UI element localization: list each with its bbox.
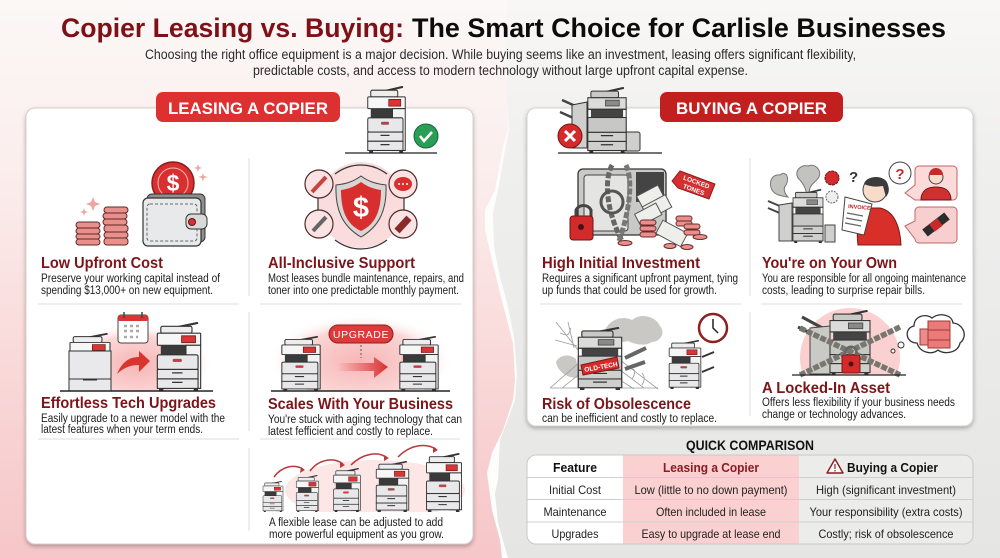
body: effortless tech upgrades: Easily upgrade to a newer model with the (41, 413, 225, 425)
icon: upgrade arrow copiers: UPGRADE (333, 329, 389, 341)
buying badge (660, 92, 843, 122)
table row: upgrades: Easy to upgrade at lease end (642, 527, 780, 541)
body: all-inclusive support: toner into one predictable monthly payment. (268, 285, 459, 297)
table row: maintenance: Maintenance (544, 505, 607, 519)
title: Copier Leasing vs. Buying: (61, 13, 404, 43)
table row: maintenance: Your responsibility (extra costs) (810, 505, 962, 519)
icon: obsolete copier: OLD-TECH (584, 361, 619, 374)
icon: coins and wallet (76, 162, 208, 246)
body: effortless tech upgrades (41, 413, 225, 436)
leasing badge (156, 92, 340, 122)
icon: owner with repair bill (768, 162, 957, 245)
body: scales with your business: latest fefficient and costly to replace. (268, 426, 433, 438)
heading: low upfront cost: Low Upfront Cost (41, 255, 163, 272)
icon: growing copier fleet (263, 445, 470, 520)
heading: you're on your own: You're on Your Own (762, 255, 897, 272)
body: low upfront cost: spending $13,000+ on new equipment. (41, 285, 213, 297)
heading: all-inclusive support: All-Inclusive Support (268, 255, 415, 272)
body: high initial investment: up funds that could be used for growth. (542, 285, 717, 297)
icon: warning triangle (827, 459, 843, 473)
buying badge: BUYING A COPIER (676, 99, 827, 118)
icon: owner with repair bill: INVOICE (848, 204, 871, 212)
background: buying side (493, 0, 1000, 558)
icon: safe, chain, money (570, 165, 715, 250)
body: all-inclusive support: Most leases bundle maintenance, repairs, and (268, 273, 464, 285)
panel: leasing a copier (26, 87, 473, 544)
table row: maintenance: Often included in lease (656, 505, 766, 519)
body: high initial investment (542, 273, 738, 297)
body: effortless tech upgrades: latest features when your term ends. (41, 424, 203, 436)
body: scales with your business (268, 414, 462, 438)
heading: high initial investment: High Initial Investment (542, 255, 700, 272)
body: low upfront cost (41, 273, 221, 297)
icon: coins and wallet: $ (167, 170, 180, 196)
heading: quick comparison: QUICK COMPARISON (686, 437, 814, 453)
icon: purchased copier with cross (558, 88, 662, 153)
icon: safe, chain, money: TONES (682, 183, 706, 198)
background: leasing side (0, 0, 515, 558)
icon: tech upgrade copiers (60, 312, 213, 407)
icon: obsolete copier (550, 314, 727, 390)
icon: leased copier with check (345, 87, 438, 153)
body: scales with your business: You're stuck with aging technology that can (268, 414, 462, 426)
body: a locked-in asset: change or technology advances. (762, 409, 906, 421)
icon: chained copier (792, 308, 964, 375)
table row: initial cost: Low (little to no down payment) (634, 483, 788, 497)
title: The Smart Choice for Carlisle Businesses (412, 13, 946, 43)
caption: flexible lease: A flexible lease can be adjusted to add (269, 517, 443, 529)
icon: safe, chain, money: LOCKED (682, 175, 711, 191)
table header (553, 460, 938, 475)
title (61, 13, 946, 43)
icon: support shield (305, 162, 417, 249)
body: high initial investment: Requires a significant upfront payment, tying (542, 273, 738, 285)
heading: risk of obsolescence: Risk of Obsolescence (542, 396, 691, 413)
heading: a locked-in asset: A Locked-In Asset (762, 380, 890, 397)
intro text: predictable costs, and access to modern technology without large upfront capital expense. (253, 63, 748, 78)
table header: Feature (553, 460, 597, 475)
icon: support shield: $ (353, 192, 369, 224)
table header: Leasing a Copier (663, 460, 759, 475)
body: you're on your own (762, 273, 966, 297)
table row: initial cost: Initial Cost (549, 483, 602, 497)
intro text: Choosing the right office equipment is a major decision. While buying seems like an investment, leasing offers significant flexibility, (145, 47, 856, 62)
heading: scales with your business: Scales With Your Business (268, 396, 453, 413)
body: all-inclusive support (268, 273, 464, 297)
body: low upfront cost: Preserve your working capital instead of (41, 273, 221, 285)
panel: buying a copier (527, 88, 973, 426)
table row: upgrades (552, 527, 954, 541)
caption: flexible lease: more powerful equipment as you grow. (269, 529, 444, 541)
body: a locked-in asset: Offers less flexibility if your business needs (762, 397, 955, 409)
comparison table (527, 455, 973, 544)
icon: owner with repair bill: ? (849, 169, 858, 186)
table header: Buying a Copier (847, 460, 938, 475)
body: risk of obsolescence: can be inefficient and costly to replace. (542, 413, 717, 425)
table row: maintenance (544, 505, 962, 519)
table row: initial cost (549, 483, 956, 497)
body: a locked-in asset (762, 397, 955, 421)
table row: upgrades: Costly; risk of obsolescence (818, 527, 954, 541)
body: you're on your own: costs, leading to surprise repair bills. (762, 285, 925, 297)
icon: owner with repair bill: ? (895, 166, 905, 183)
table row: upgrades: Upgrades (552, 527, 598, 541)
intro text (145, 47, 856, 78)
caption: flexible lease (269, 517, 444, 541)
icon: upgrade arrow copiers (265, 314, 460, 410)
table row: initial cost: High (significant investment) (816, 483, 956, 497)
leasing badge: LEASING A COPIER (168, 99, 328, 118)
heading: effortless tech upgrades: Effortless Tech Upgrades (41, 395, 216, 412)
